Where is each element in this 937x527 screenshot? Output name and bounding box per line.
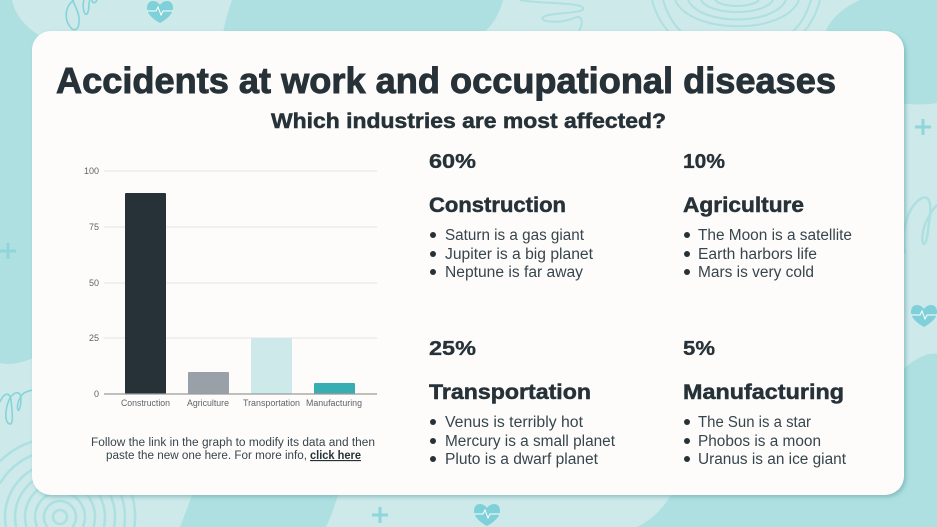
panel: Manufacturing: Phobos is a moon: [698, 433, 821, 450]
y axis labels: 25: [89, 333, 99, 343]
icon: plus left: [0, 243, 16, 259]
panel: Transportation: Mercury is a small planet: [445, 433, 616, 450]
panel: Construction: Neptune is far away: [445, 264, 583, 281]
x axis labels: Construction: [121, 398, 170, 408]
pattern: spiral rings bottom left: [0, 438, 135, 527]
panel: Transportation: [429, 338, 616, 468]
y axis labels: 100: [84, 166, 99, 176]
title: Accidents at work and occupational diseases: [56, 60, 836, 101]
panel: Agriculture: 10%: [683, 151, 725, 173]
panel: Manufacturing: The Sun is a star: [698, 414, 811, 431]
panel: Manufacturing: Uranus is an ice giant: [698, 451, 847, 468]
caption: [91, 437, 375, 462]
panel: Transportation: 25%: [429, 338, 476, 360]
subtitle: Which industries are most affected?: [271, 110, 666, 133]
bar: Construction: [125, 193, 166, 394]
bar: Manufacturing: [314, 383, 355, 394]
x axis labels: Manufacturing: [306, 398, 362, 408]
squiggle: top left: [66, 0, 97, 30]
bar chart: [84, 166, 377, 408]
panel: Transportation: Venus is terribly hot: [445, 414, 584, 431]
caption: paste the new one here. For more info,: [106, 450, 307, 462]
icon: heart right: [911, 305, 937, 327]
panel: Agriculture: Agriculture: [683, 193, 804, 217]
panel: Agriculture: Earth harbors life: [698, 246, 817, 263]
bar: Transportation: [251, 338, 292, 394]
panel: Agriculture: The Moon is a satellite: [698, 227, 852, 244]
panel: Construction: [429, 151, 594, 281]
caption: Follow the link in the graph to modify its data and then: [91, 437, 375, 449]
panel: Agriculture: Mars is very cold: [698, 264, 814, 281]
y axis labels: 0: [94, 389, 99, 399]
x axis labels: Agriculture: [187, 398, 229, 408]
caption: click here: [310, 450, 361, 462]
squiggle: right: [904, 197, 937, 253]
icon: heart bottom: [474, 504, 500, 526]
panel: Construction: 60%: [429, 151, 476, 173]
x axis labels: Transportation: [243, 398, 300, 408]
y axis labels: [84, 166, 99, 399]
icon: heart top: [147, 1, 173, 23]
panel: Transportation: Transportation: [429, 380, 591, 404]
panel: Transportation: Pluto is a dwarf planet: [445, 451, 599, 468]
panel: Construction: Saturn is a gas giant: [445, 227, 585, 244]
x axis labels: [121, 398, 362, 408]
squiggle: left: [0, 390, 32, 424]
y axis labels: 50: [89, 278, 99, 288]
panel: Manufacturing: Manufacturing: [683, 380, 844, 404]
squiggle: top centre: [520, 0, 583, 31]
pattern: fingerprint rings top right: [652, 0, 820, 54]
y axis labels: 75: [89, 222, 99, 232]
panel: Manufacturing: 5%: [683, 338, 715, 360]
panel: Construction: Jupiter is a big planet: [445, 246, 594, 263]
panel: Construction: Construction: [429, 193, 566, 217]
icon: plus bottom: [372, 507, 388, 523]
panel: Manufacturing: [683, 338, 847, 468]
bar: Agriculture: [188, 372, 229, 394]
panel: Agriculture: [683, 151, 852, 281]
icon: plus right: [915, 119, 931, 135]
